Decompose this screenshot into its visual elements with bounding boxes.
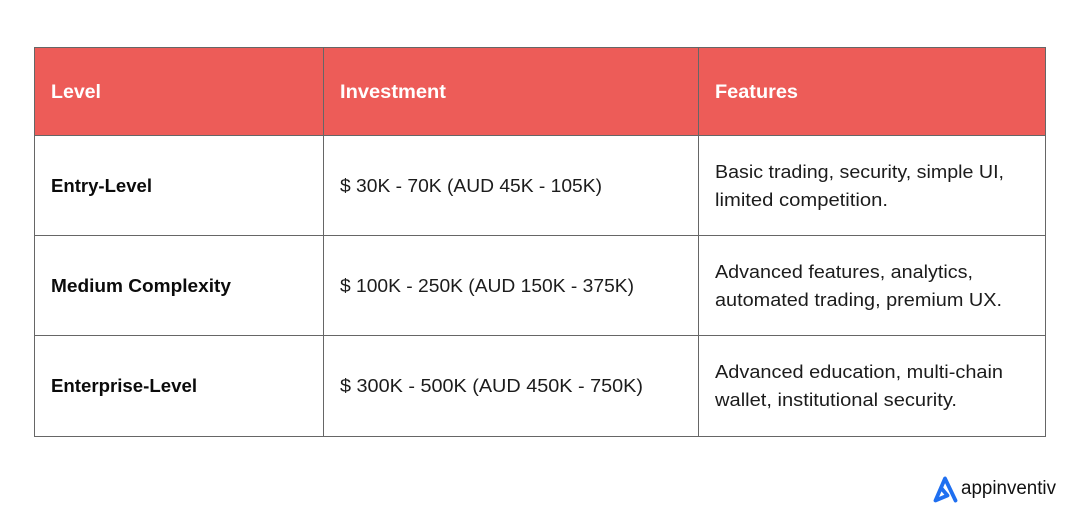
row: Enterprise-Level: Enterprise-Level xyxy=(51,376,197,396)
row: Entry-Level: $ 30K - 70K (AUD 45K - 105K) xyxy=(340,176,602,196)
header: Level: Level xyxy=(51,82,101,103)
row: Entry-Level xyxy=(51,162,1004,210)
row: Medium Complexity: Medium Complexity xyxy=(51,276,231,296)
icon: blue arrow mark xyxy=(936,478,956,500)
row: Enterprise-Level: wallet, institutional security. xyxy=(714,390,957,410)
header: Investment: Investment xyxy=(340,82,447,103)
row: Enterprise-Level xyxy=(51,362,1003,410)
row: Enterprise-Level: $ 300K - 500K (AUD 450K - 750K) xyxy=(340,376,643,396)
logo: appinventiv: appinventiv xyxy=(961,478,1056,499)
header: Features: Features xyxy=(715,82,798,103)
row: Entry-Level: Basic trading, security, simple UI, xyxy=(715,162,1004,182)
row: Entry-Level: Entry-Level xyxy=(51,176,152,196)
row: Medium Complexity: $ 100K - 250K (AUD 150K - 375K) xyxy=(340,276,634,296)
row: Medium Complexity xyxy=(51,262,1002,310)
row: Medium Complexity: Advanced features, analytics, xyxy=(715,262,973,282)
row: Entry-Level: limited competition. xyxy=(715,190,888,210)
table header band xyxy=(34,48,1046,136)
row: Medium Complexity: automated trading, premium UX. xyxy=(715,290,1002,310)
row: Enterprise-Level: Advanced education, multi-chain xyxy=(715,362,1003,382)
